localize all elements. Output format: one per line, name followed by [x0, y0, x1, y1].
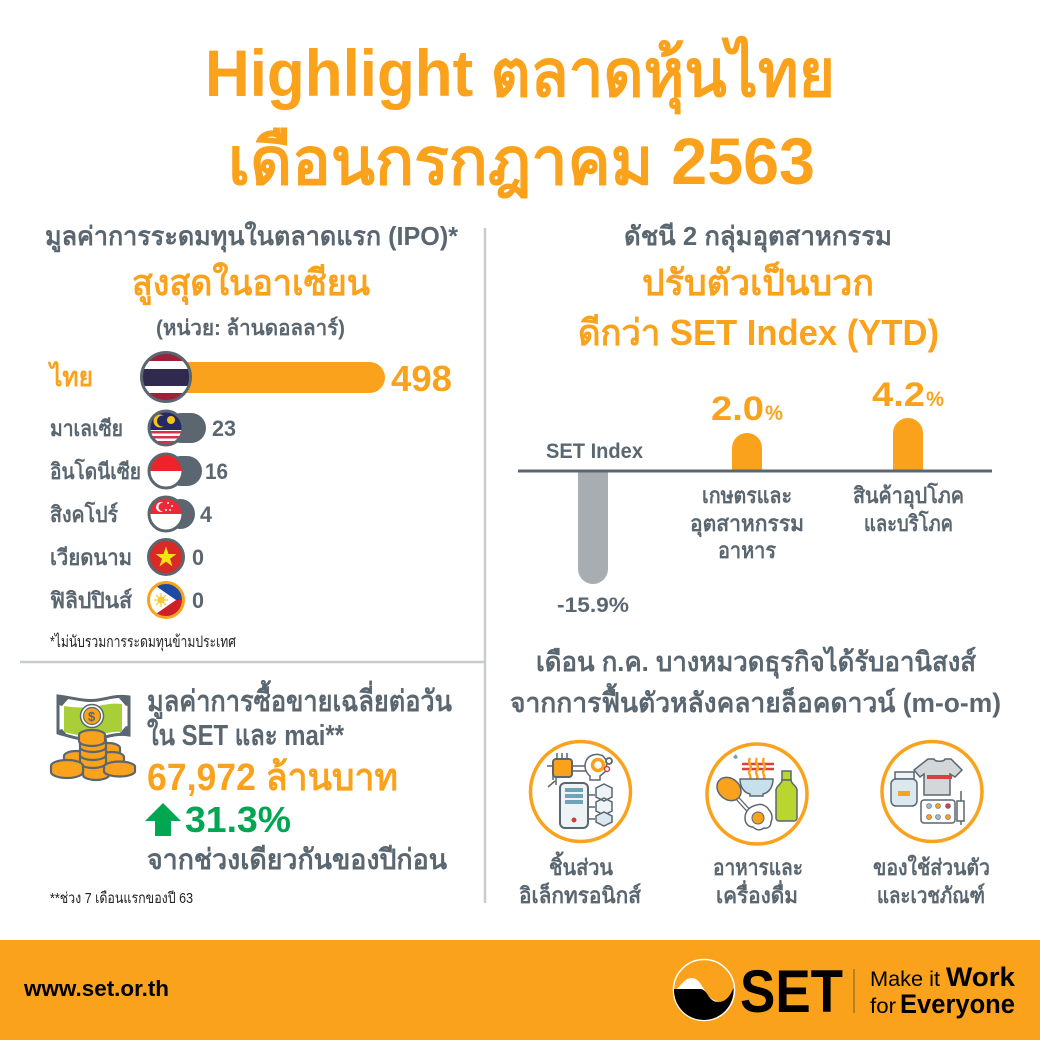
bar row: Thailand: 498: [391, 358, 452, 399]
icon: green up arrow: [145, 803, 181, 836]
bar row: Malaysia: มาเลเซีย: [50, 416, 123, 441]
diverging bar chart: 2.0: [711, 390, 764, 428]
bar row: Malaysia: [50, 410, 236, 446]
sector labels: [519, 851, 990, 908]
bar row: Vietnam: [50, 540, 204, 574]
diverging bar chart: -15.9%: [557, 594, 629, 617]
IPO heading: (หน่วย: ล้านดอลลาร์): [156, 316, 345, 340]
bar row: Philippines: 0: [192, 588, 204, 613]
bar row: Singapore: [50, 497, 213, 531]
footnote: IPO: *ไม่นับรวมการระดมทุนข้ามประเทศ: [50, 632, 236, 652]
SET logo: SET: [740, 958, 843, 1025]
sector labels: เครื่องดื่ม: [716, 879, 798, 908]
panel: IPO ranking: [45, 221, 459, 652]
turnover heading: [147, 679, 452, 752]
growth value: 31.3%: [185, 799, 291, 840]
tagline: [870, 962, 1016, 1019]
tagline: for: [870, 995, 896, 1018]
bar row: Thailand: ไทย: [47, 361, 93, 392]
diverging bar chart: และบริโภค: [864, 510, 953, 536]
diverging bar chart: %: [765, 402, 783, 425]
footnote: turnover: **ช่วง 7 เดือนแรกของปี 63: [50, 890, 193, 907]
turnover heading: มูลค่าการซื้อขายเฉลี่ยต่อวัน: [147, 679, 452, 719]
diverging bar chart: สินค้าอุปโภค: [853, 482, 964, 510]
tagline: Everyone: [900, 989, 1015, 1019]
diverging bar chart: อาหาร: [718, 538, 776, 563]
sectors heading: [510, 646, 1001, 718]
SET logo: [674, 958, 854, 1025]
index heading: [578, 221, 939, 353]
website url: www.set.or.th: [23, 976, 169, 1001]
turnover heading: ใน SET และ mai**: [147, 718, 345, 752]
panel: sector index: [518, 221, 992, 617]
sector labels: ของใช้ส่วนตัว: [873, 854, 990, 880]
diverging bar chart: [518, 376, 992, 617]
index heading: ปรับตัวเป็นบวก: [642, 260, 874, 303]
icon: food and drink: [707, 744, 807, 844]
bar row: Philippines: ฟิลิปปินส์: [50, 588, 133, 613]
index heading: ดัชนี 2 กลุ่มอุตสาหกรรม: [624, 221, 892, 253]
IPO heading: [45, 221, 459, 340]
bar row: Singapore: 4: [200, 502, 213, 527]
bar row: Singapore: สิงคโปร์: [50, 501, 118, 527]
bar row: Indonesia: [50, 454, 228, 488]
IPO heading: มูลค่าการระดมทุนในตลาดแรก (IPO)*: [45, 221, 459, 253]
footer band: [0, 940, 1040, 1040]
bar row: Indonesia: 16: [205, 459, 228, 484]
growth caption: จากช่วงเดียวกันของปีก่อน: [147, 844, 447, 875]
panel: average daily turnover: [50, 679, 452, 907]
diverging bar chart: %: [926, 388, 944, 411]
turnover value: 67,972 ล้านบาท: [147, 757, 398, 799]
diverging bar chart: อุตสาหกรรม: [690, 511, 804, 538]
icon: banknote and coins: [51, 696, 135, 780]
sector labels: ชิ้นส่วน: [549, 851, 613, 880]
title: Highlight ตลาดหุ้นไทย: [205, 35, 835, 115]
sectors heading: เดือน ก.ค. บางหมวดธุรกิจได้รับอานิสงส์: [536, 646, 976, 679]
sector labels: อาหารและ: [713, 855, 803, 880]
icon: electronic parts: [530, 742, 630, 842]
title: [205, 35, 835, 199]
index heading: ดีกว่า SET Index (YTD): [578, 312, 939, 353]
diverging bar chart: SET Index: [546, 440, 643, 463]
icon: personal care and pharmaceuticals: [882, 742, 982, 842]
title: เดือนกรกฎาคม 2563: [228, 124, 815, 199]
bar row: Vietnam: เวียดนาม: [50, 545, 132, 570]
IPO heading: สูงสุดในอาเซียน: [132, 261, 370, 306]
panel: benefiting sectors: [510, 646, 1001, 908]
bar row: Thailand: [47, 352, 452, 402]
sector labels: และเวชภัณฑ์: [877, 883, 985, 908]
bar row: Indonesia: อินโดนีเซีย: [50, 458, 141, 484]
tagline: Make it: [870, 968, 940, 991]
sector labels: อิเล็กทรอนิกส์: [519, 881, 642, 908]
bar row: Malaysia: 23: [212, 416, 236, 441]
bar row: Vietnam: 0: [192, 545, 204, 570]
sectors heading: จากการฟื้นตัวหลังคลายล็อคดาวน์ (m-o-m): [510, 682, 1001, 718]
diverging bar chart: 4.2: [872, 376, 925, 414]
diverging bar chart: เกษตรและ: [702, 483, 792, 508]
tagline: Work: [946, 962, 1016, 992]
icon: banknote and coins: $: [88, 709, 96, 724]
bar row: Philippines: [50, 582, 204, 618]
